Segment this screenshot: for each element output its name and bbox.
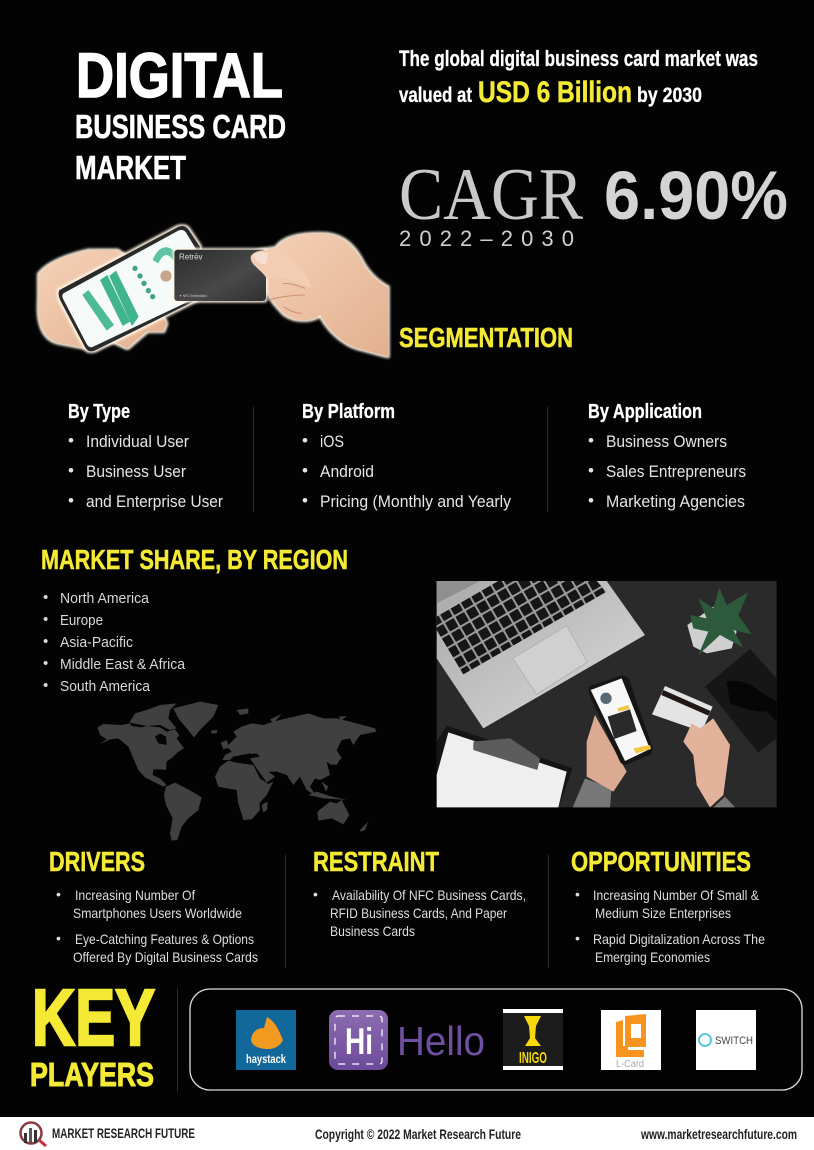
heading: key players: KEY [32,973,155,1062]
region list: Asia-Pacific [60,634,133,651]
panel: drivers: • [56,930,61,946]
left hand [38,250,167,348]
NFC card: Retrēv [179,253,203,262]
segment: by type: Individual User [86,432,189,451]
CAGR figure: 6.90% [604,157,788,234]
heading: segmentation: SEGMENTATION [399,322,573,353]
segment: by platform [302,401,511,511]
notebook and glasses [705,649,777,752]
segment: by application: • [588,461,594,480]
segment: by platform: Pricing (Monthly and Yearly [320,492,511,511]
region list: • [43,633,48,650]
title [75,41,286,186]
CAGR figure: CAGR [399,154,584,236]
segment: by platform: Android [320,462,374,481]
segment: by application: • [588,491,594,510]
right hand [251,233,388,357]
segment: by type: By Type [68,401,130,423]
segment: by platform: • [302,431,308,450]
panel: drivers: • [56,886,61,902]
market value statement: by 2030 [637,84,702,107]
illustration: hands tapping NFC card on phone [38,226,388,357]
panel: drivers: Increasing Number Of [75,887,195,903]
panel: restraint [313,846,526,939]
logo: SWITCH [696,1010,756,1070]
footer logo icon [20,1122,46,1146]
logo: HiHello: Hi [345,1021,373,1062]
clipboard [437,726,573,807]
footer bar: Copyright © 2022 Market Research Future [315,1126,521,1142]
panel: drivers: Smartphones Users Worldwide [73,905,242,921]
region list: South America [60,678,151,695]
heading: key players: PLAYERS [30,1056,154,1093]
logo: L-Card: L-Card [616,1059,644,1070]
region list: Europe [60,612,103,629]
region list: • [43,655,48,672]
segment: by type: • [68,461,74,480]
right hand and sleeve [713,797,735,807]
segment: by platform: iOS [320,432,344,451]
logo: haystack: haystack [246,1052,286,1066]
segment: by type: • [68,431,74,450]
footer bar [0,1117,814,1150]
segment: by application: Marketing Agencies [606,492,745,511]
market value statement: USD 6 Billion [478,76,632,109]
panel: drivers: DRIVERS [49,846,145,877]
NFC card: ✦ NFC Embedded [179,294,207,298]
region list: • [43,589,48,606]
region list [43,589,186,695]
logo: SWITCH: SWITCH [715,1035,753,1047]
panel: opportunities: Emerging Economies [595,949,710,965]
laptop [437,581,645,728]
panel: drivers [49,846,258,965]
panel: opportunities [571,846,765,965]
credit card [652,686,713,732]
segment: by application: • [588,431,594,450]
region list: • [43,611,48,628]
panel: restraint: RESTRAINT [313,846,439,877]
segment: by application [588,401,746,511]
segment: by platform: • [302,461,308,480]
logo: L-Card [601,1010,661,1070]
segment: by application: Business Owners [606,432,727,451]
title: DIGITAL [76,41,283,111]
phone [588,676,653,764]
segment: by type: and Enterprise User [86,492,223,511]
panel: opportunities: Medium Size Enterprises [595,905,731,921]
phone [58,226,200,351]
segment: by platform: • [302,491,308,510]
photo: phone QR code and card on desk [437,581,777,807]
plant [687,607,737,653]
panel: restraint: Availability Of NFC Business Cards, [332,887,526,903]
market value statement: valued at [399,84,472,107]
title: BUSINESS CARD [75,108,286,145]
logo: INIGO [503,1009,563,1070]
heading: key players [30,973,155,1093]
footer bar: MARKET RESEARCH FUTURE [52,1125,195,1141]
NFC card [174,250,266,301]
panel: drivers: Offered By Digital Business Cards [73,949,258,965]
region list: North America [60,590,150,607]
world map [97,702,377,841]
segment: by type: • [68,491,74,510]
panel: opportunities: OPPORTUNITIES [571,846,751,877]
panel: restraint: RFID Business Cards, And Paper [330,905,507,921]
logo: HiHello [329,1010,485,1070]
segment: by type: Business User [86,462,186,481]
panel: restraint: Business Cards [330,923,415,939]
panel: opportunities: • [575,930,580,946]
title: MARKET [75,149,186,186]
region list: Middle East & Africa [60,656,186,673]
left hand and sleeve [573,778,612,807]
panel: drivers: Eye-Catching Features & Options [75,931,254,947]
logo: HiHello: Hello [397,1018,485,1064]
panel: restraint: • [313,886,318,902]
key players panel [190,989,802,1090]
CAGR figure [399,154,788,251]
panel: opportunities: • [575,886,580,902]
region list: • [43,677,48,694]
segment: by type [68,401,223,511]
CAGR figure: 2022–2030 [399,226,574,251]
logo: haystack [236,1010,296,1070]
segment: by application: Sales Entrepreneurs [606,462,746,481]
heading: market share by region: MARKET SHARE, BY REGION [41,544,348,575]
logo: INIGO: INIGO [519,1050,547,1067]
segment: by platform: By Platform [302,401,395,423]
panel: opportunities: Rapid Digitalization Across The [593,931,765,947]
segment: by application: By Application [588,401,702,423]
panel: opportunities: Increasing Number Of Small & [593,887,760,903]
thumb [251,250,312,288]
market value statement [399,46,758,109]
